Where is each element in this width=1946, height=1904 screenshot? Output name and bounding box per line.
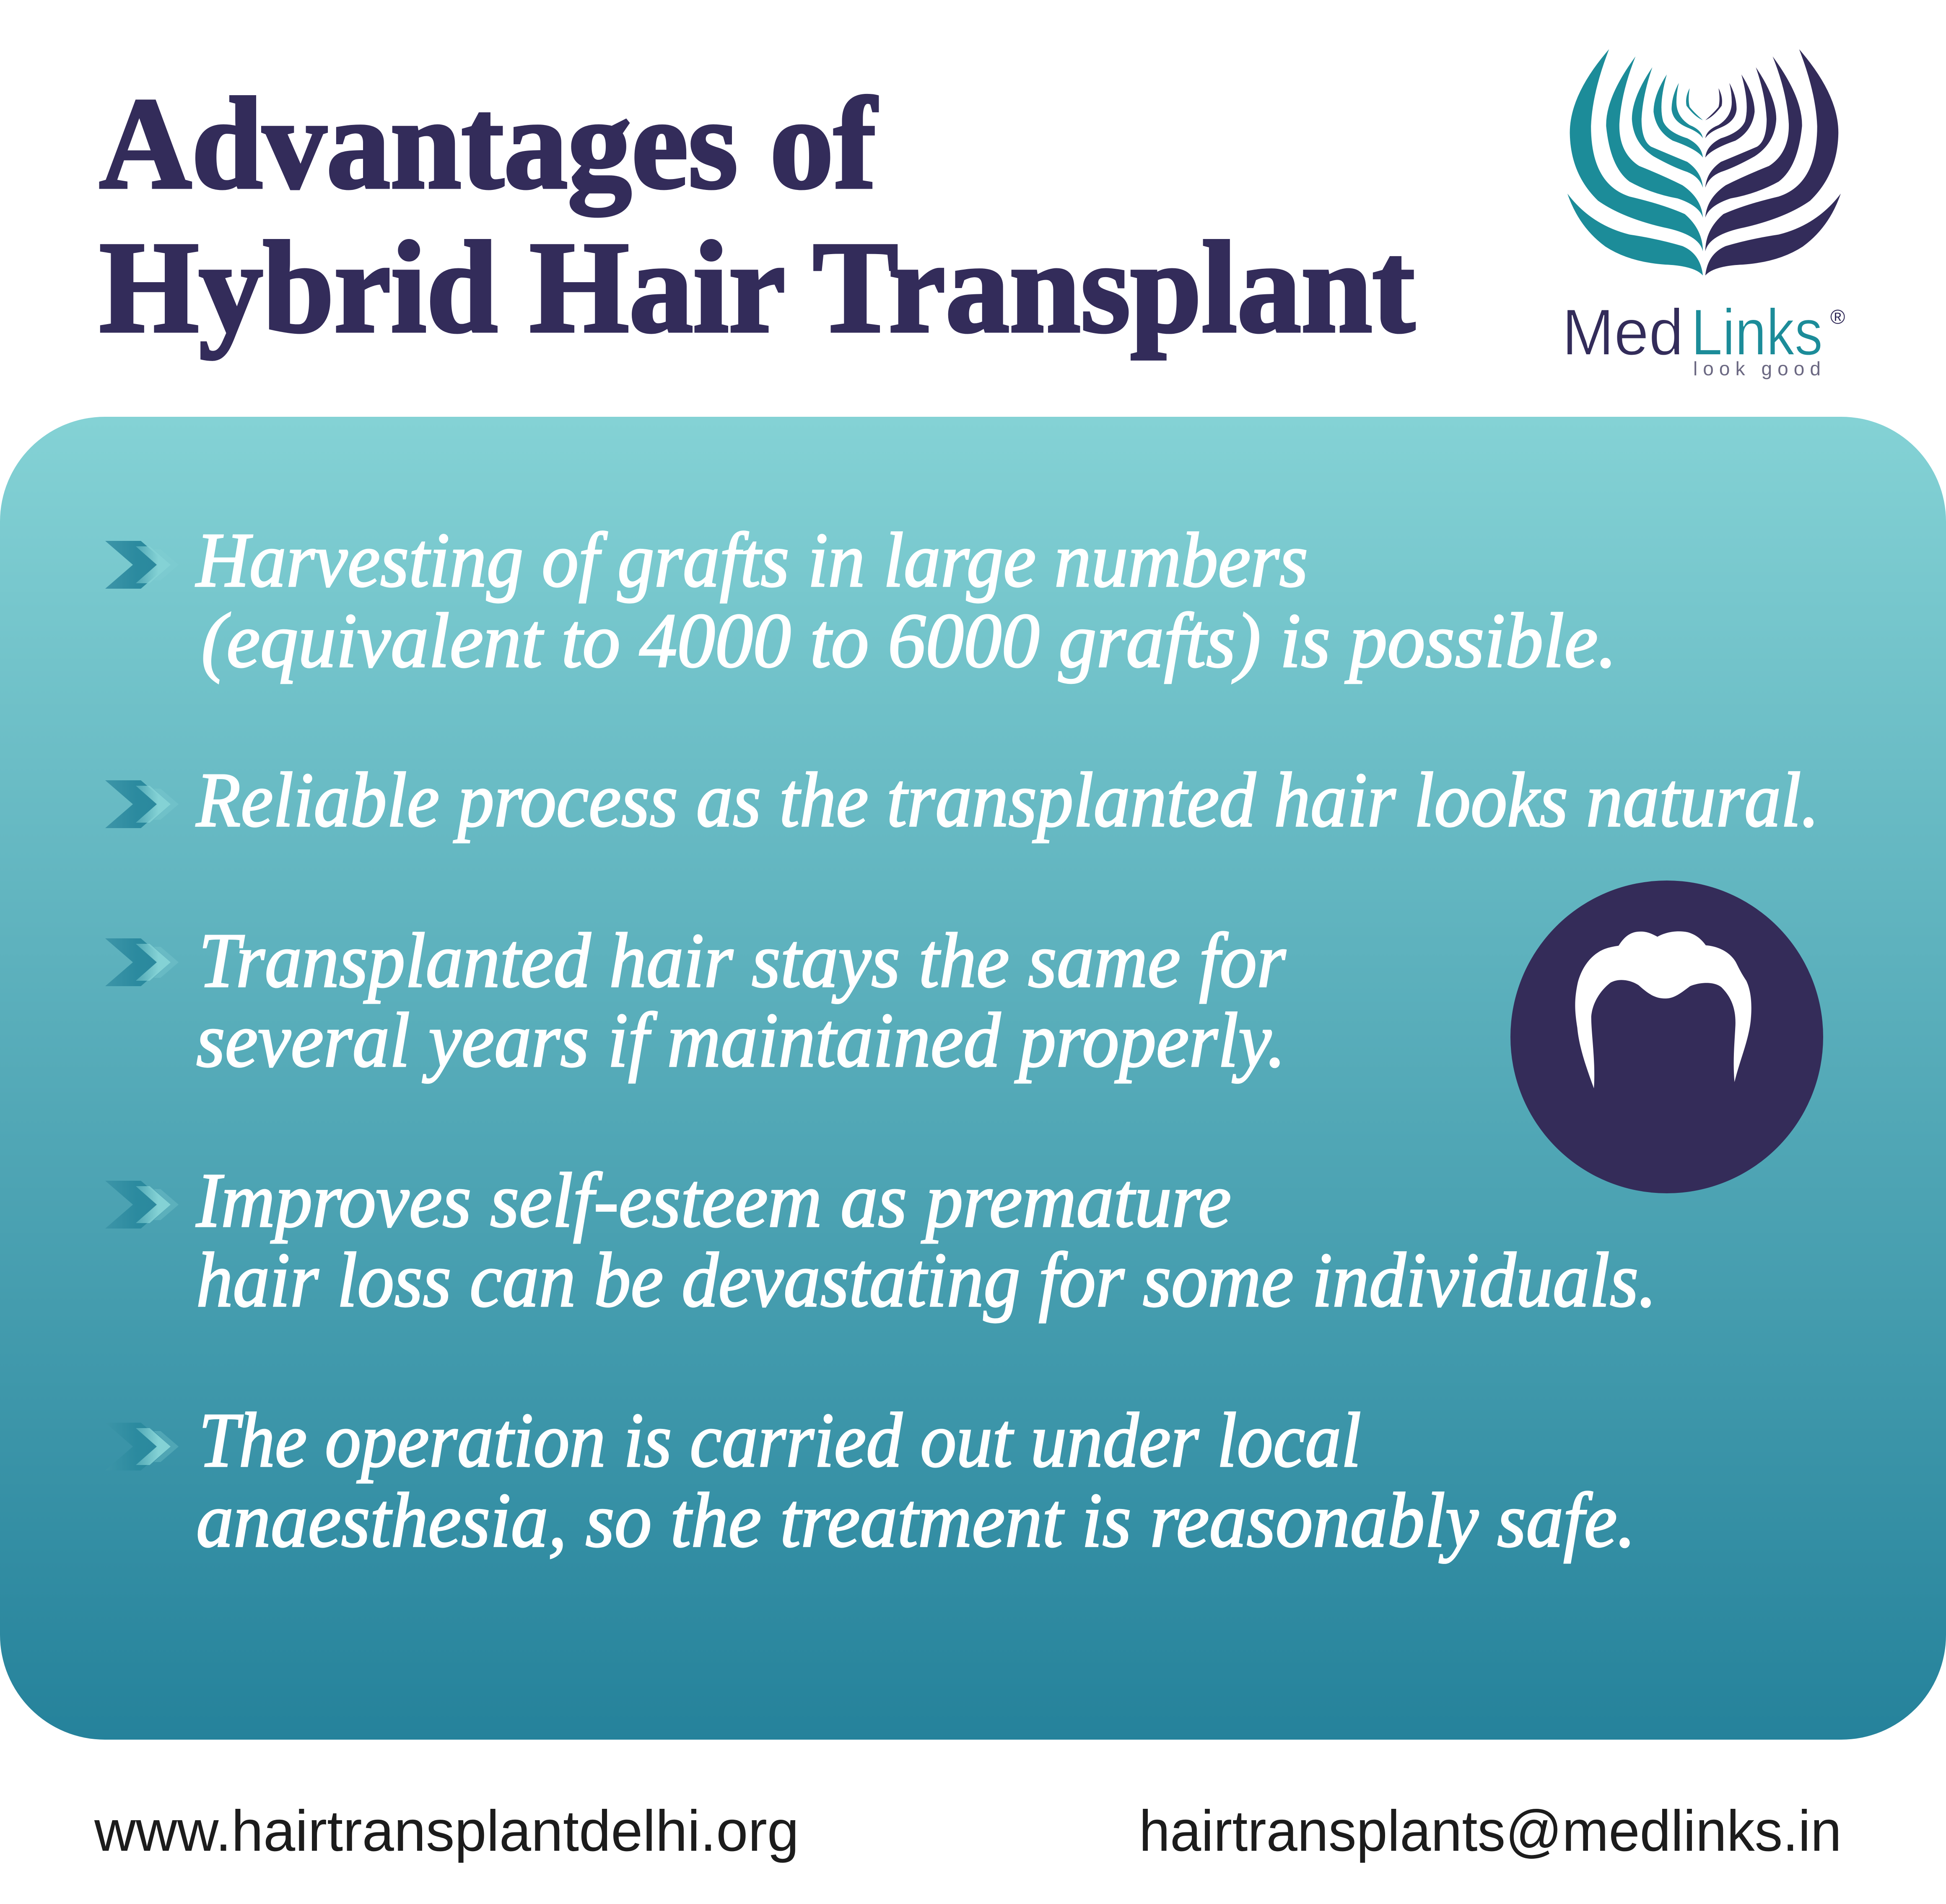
logo wordmark bbox=[1562, 296, 1845, 379]
text: bullet 3: Transplanted hair stays the same for bbox=[199, 917, 1286, 1004]
icon: chevron 4 bbox=[105, 1181, 179, 1229]
bullet 4 bbox=[105, 1157, 1657, 1323]
icon: hair in circle bbox=[1510, 881, 1823, 1193]
icon: chevron 1 bbox=[105, 541, 179, 589]
text: bullet 1 bbox=[195, 517, 1617, 684]
text: bullet 2: Reliable process as the transplanted hair looks natural. bbox=[196, 757, 1819, 843]
bullet 5 bbox=[105, 1397, 1636, 1564]
title: Advantages of bbox=[99, 71, 877, 218]
icon: chevron 5 bbox=[105, 1423, 179, 1470]
bullet 1 bbox=[105, 517, 1617, 684]
text: bullet 3: several years if maintained properly. bbox=[196, 997, 1286, 1083]
title: Hybrid Hair Transplant bbox=[99, 215, 1416, 360]
text: bullet 5: The operation is carried out under local bbox=[199, 1397, 1361, 1483]
logo: MedLinks bbox=[1562, 49, 1845, 379]
text: bullet 4: hair loss can be devastating for some individuals. bbox=[196, 1237, 1657, 1323]
title bbox=[99, 71, 1416, 360]
text: bullet 5: anaesthesia, so the treatment is reasonably safe. bbox=[196, 1477, 1636, 1564]
bullet 3 bbox=[105, 917, 1286, 1083]
logo wordmark: ® bbox=[1830, 306, 1845, 328]
logo wordmark: Med bbox=[1562, 296, 1684, 369]
icon: logo leaf mark bbox=[1567, 49, 1841, 275]
text: bullet 3 bbox=[196, 917, 1286, 1083]
text: bullet 4 bbox=[196, 1157, 1657, 1323]
icon: chevron 3 bbox=[105, 938, 179, 986]
footer: website: www.hairtransplantdelhi.org bbox=[94, 1799, 799, 1863]
logo wordmark: Links bbox=[1691, 296, 1823, 369]
text: bullet 1: Harvesting of grafts in large numbers bbox=[195, 517, 1308, 603]
footer: email: hairtransplants@medlinks.in bbox=[1139, 1799, 1842, 1863]
icon: chevron 2 bbox=[105, 780, 179, 828]
text: bullet 1: (equivalent to 4000 to 6000 grafts) is possible. bbox=[201, 597, 1617, 684]
text: bullet 5 bbox=[196, 1397, 1636, 1564]
bullet 2 bbox=[105, 757, 1819, 843]
panel: gradient background bbox=[0, 417, 1946, 1740]
logo wordmark: look good bbox=[1693, 358, 1821, 379]
text: bullet 4: Improves self-esteem as premature bbox=[196, 1157, 1231, 1244]
